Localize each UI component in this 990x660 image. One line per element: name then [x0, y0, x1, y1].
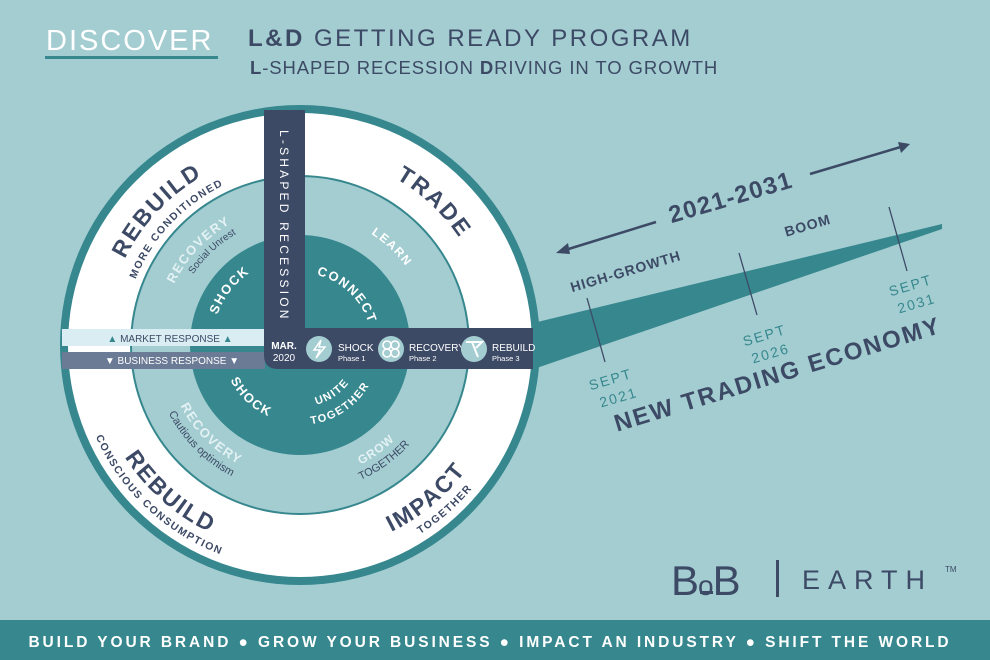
icon: rebuild phase 3	[461, 336, 535, 363]
date labels: SEPT	[741, 321, 788, 349]
title: L&D GETTING READY PROGRAM	[248, 25, 693, 52]
new trading economy label: NEW TRADING ECONOMY	[611, 312, 945, 438]
logo: BoB	[671, 557, 740, 604]
outer ring labels: IMPACT	[385, 462, 462, 532]
logo: EARTH	[802, 565, 933, 595]
icon: shock phase 1	[306, 336, 374, 363]
inner labels: UNITE	[314, 379, 348, 404]
inner labels: CONNECT	[318, 267, 377, 320]
L-shaped recession bar: MAR.	[271, 341, 297, 352]
header: discover: DISCOVER	[46, 25, 213, 57]
date labels: 2031	[896, 290, 938, 316]
icon: recovery phase 2: RECOVERY	[409, 343, 465, 354]
middle ring labels: RECOVERY	[180, 402, 242, 462]
business response band	[62, 352, 265, 369]
timeline arrows	[556, 142, 910, 254]
market response band	[62, 329, 265, 346]
outer ring labels: REBUILD	[112, 166, 198, 258]
outer ring labels: REBUILD	[125, 449, 214, 530]
date labels: SEPT	[587, 365, 634, 393]
date labels: 2026	[750, 340, 792, 366]
icon: recovery phase 2	[378, 336, 465, 363]
middle ring labels	[166, 216, 412, 479]
outer ring labels: TRADE	[400, 165, 472, 237]
date labels: SEPT	[887, 271, 934, 299]
subtitle: L-SHAPED RECESSION DRIVING IN TO GROWTH	[250, 57, 718, 78]
date labels	[587, 271, 938, 410]
business response band: ▼ BUSINESS RESPONSE ▼	[105, 356, 239, 367]
icon: rebuild phase 3: Phase 3	[492, 354, 520, 363]
inner labels: SHOCK	[210, 266, 249, 314]
boom label: BOOM	[783, 211, 833, 240]
inner labels	[210, 266, 377, 424]
timeline wedge	[525, 224, 942, 372]
middle ring labels: LEARN	[372, 228, 412, 266]
market response band: ▲ MARKET RESPONSE ▲	[107, 334, 233, 345]
tick marks	[587, 207, 907, 362]
L-shaped recession bar	[264, 110, 533, 369]
footer bar	[0, 620, 990, 660]
period label: 2021-2031	[666, 167, 796, 229]
inner labels: TOGETHER	[310, 383, 369, 424]
date labels: 2021	[598, 384, 640, 410]
circle diagram	[60, 105, 539, 585]
outer ring labels: TOGETHER	[416, 486, 472, 533]
middle ring labels: RECOVERY	[166, 216, 227, 283]
icon: shock phase 1: Phase 1	[338, 354, 366, 363]
icon: recovery phase 2: Phase 2	[409, 354, 437, 363]
high-growth label: HIGH-GROWTH	[568, 247, 683, 295]
icon: shock phase 1: SHOCK	[338, 343, 374, 354]
middle ring labels: TOGETHER	[358, 440, 410, 479]
middle ring labels: Social Unrest	[188, 229, 236, 274]
L-shaped recession bar: 2020	[273, 353, 296, 364]
logo	[671, 557, 957, 604]
icon: rebuild phase 3: REBUILD	[492, 343, 535, 354]
inner labels: SHOCK	[232, 377, 272, 416]
outer ring labels: MORE CONDITIONED	[129, 180, 222, 279]
middle ring labels: Cautious optimism	[170, 411, 234, 476]
outer ring labels: CONSCIOUS CONSUMPTION	[96, 435, 222, 554]
L-shaped recession bar: L-SHAPED RECESSION	[277, 130, 291, 322]
logo: TM	[945, 565, 957, 574]
footer bar: BUILD YOUR BRAND ● GROW YOUR BUSINESS ● IMPACT AN INDUSTRY ● SHIFT THE WORLD	[28, 634, 952, 651]
outer ring labels	[96, 165, 472, 554]
middle ring labels: GROW	[358, 434, 393, 464]
